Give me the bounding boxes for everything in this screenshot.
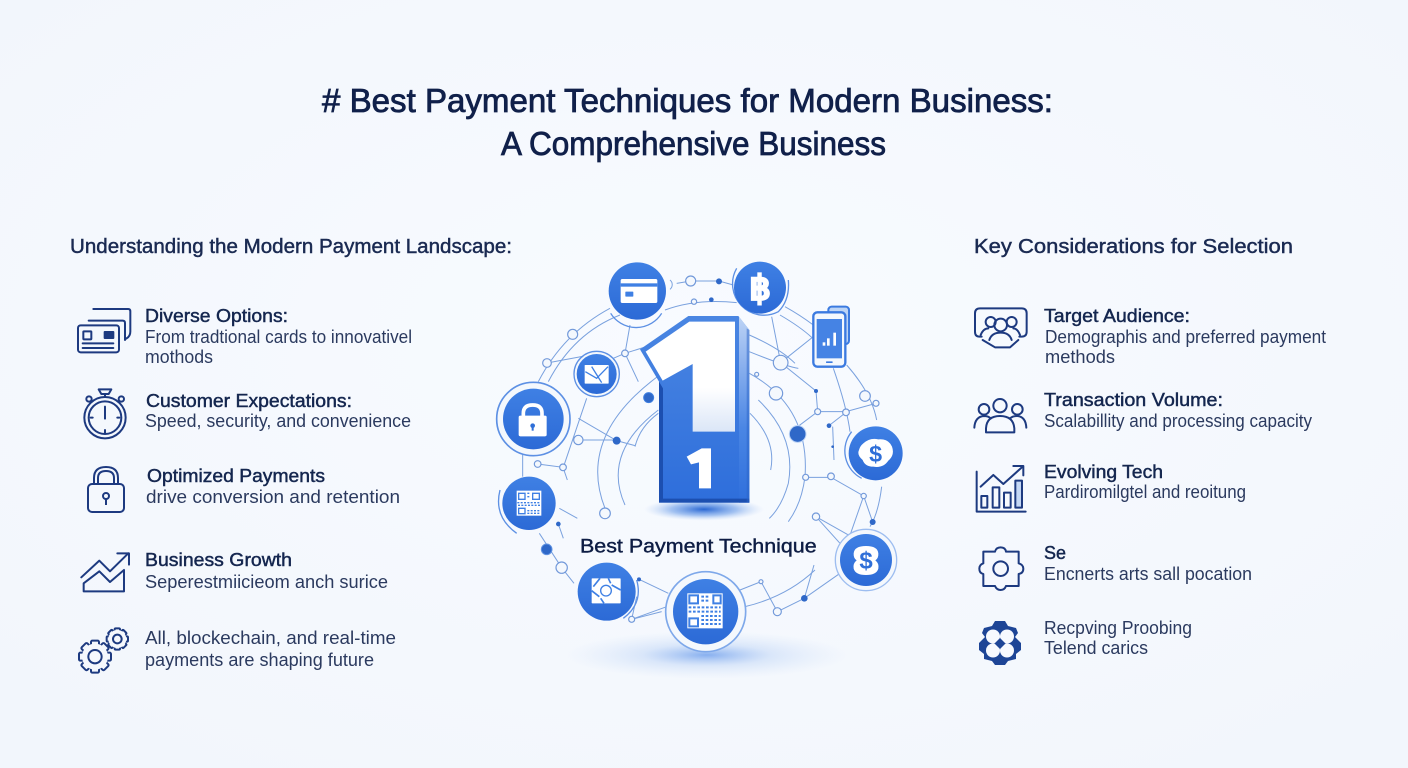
item: security xyxy=(979,543,1252,590)
text: evolving tech: Pardiromilgtel and reoitung xyxy=(1044,482,1246,502)
icon: dollar coin lower xyxy=(835,529,897,591)
text: target audience: Demographis and preferred payment xyxy=(1045,327,1326,347)
text: transaction volume xyxy=(1044,390,1312,431)
icon: solid flower badge xyxy=(979,621,1021,665)
text: recurring processing: Telend carics xyxy=(1044,638,1148,658)
text: diverse options: From tradtional cards to innovativel xyxy=(145,327,412,347)
text: diverse options xyxy=(145,306,412,367)
icon: qr bottom xyxy=(666,572,746,652)
icon: padlock xyxy=(88,467,124,512)
text: optimized payments: drive conversion and retention xyxy=(146,487,400,507)
text: evolving tech xyxy=(1044,462,1246,502)
icon: dollar coin upper xyxy=(845,426,903,480)
big number one xyxy=(640,316,764,521)
text: future technologies xyxy=(145,628,396,670)
bottom glow xyxy=(563,631,850,679)
title: A Comprehensive Business xyxy=(501,125,886,162)
central network illustration xyxy=(497,262,903,679)
title xyxy=(322,82,1053,162)
item: evolving tech xyxy=(977,462,1246,512)
icon: bar chart with arrow xyxy=(977,466,1026,512)
text: business growth xyxy=(145,550,388,592)
icon: padlock disc xyxy=(497,382,570,456)
icon: qr left xyxy=(499,477,556,533)
text: future technologies: All, blockechain, and real-time xyxy=(145,628,396,648)
icon: stacked cards xyxy=(78,309,130,352)
text: target audience: Target Audience: xyxy=(1044,306,1190,326)
text: transaction volume: Scalabillity and processing capacity xyxy=(1044,411,1312,431)
text: security xyxy=(1044,543,1252,584)
icon: stopwatch xyxy=(84,389,126,438)
item: business growth xyxy=(81,550,388,592)
item: target audience xyxy=(975,306,1326,367)
title: # Best Payment Techniques for Modern Business: xyxy=(322,82,1053,119)
icon: audience frame xyxy=(975,308,1027,347)
item: future technologies xyxy=(79,628,396,673)
text: future technologies: payments are shaping future xyxy=(145,650,374,670)
icon: smartphone xyxy=(813,307,849,367)
text: security: Encnerts arts sall pocation xyxy=(1044,564,1252,584)
text: transaction volume: Transaction Volume: xyxy=(1044,390,1223,410)
text: evolving tech: Evolving Tech xyxy=(1044,462,1163,482)
text: recurring processing xyxy=(1044,618,1192,658)
text: diverse options: Diverse Options: xyxy=(145,306,288,326)
icon: small envelope xyxy=(574,351,619,397)
text: customer expectations: Customer Expectations: xyxy=(146,391,352,411)
icon: puzzle cog xyxy=(979,547,1023,590)
icon: credit card xyxy=(609,262,666,328)
text: business growth: Seperestmiicieom anch surice xyxy=(145,572,388,592)
icon: dollar coin lower: $ xyxy=(859,548,873,575)
network nodes: filled xyxy=(541,278,876,602)
text: diverse options: mothods xyxy=(145,347,213,367)
text: optimized payments xyxy=(146,466,400,507)
icon: bitcoin: ฿ xyxy=(749,270,771,307)
item: transaction volume xyxy=(974,390,1312,432)
text: target audience xyxy=(1044,306,1326,367)
panel: understanding the modern payment landscape xyxy=(70,236,512,673)
heading: left panel: Understanding the Modern Payment Landscape: xyxy=(70,236,512,258)
icon: bitcoin xyxy=(733,262,789,315)
panel: key considerations for selection xyxy=(974,236,1326,665)
text: recurring processing: Recpving Proobing xyxy=(1044,618,1192,638)
text: customer expectations: Speed, security, and convenience xyxy=(145,411,411,431)
text: business growth: Business Growth xyxy=(145,550,292,570)
item: recurring processing xyxy=(979,618,1192,665)
icon: growth arrow xyxy=(81,553,129,591)
heading: right panel: Key Considerations for Selection xyxy=(974,236,1293,258)
icon: people group xyxy=(974,399,1026,432)
item: diverse options xyxy=(78,306,412,367)
item: customer expectations xyxy=(84,389,411,438)
icon: dollar coin upper: $ xyxy=(869,441,882,467)
text: security: Se xyxy=(1044,543,1066,563)
network nodes: hollow xyxy=(534,276,879,622)
text: customer expectations xyxy=(145,391,411,431)
center label: Best Payment Technique xyxy=(580,536,817,557)
icon: gift envelope xyxy=(578,563,638,621)
text: target audience: methods xyxy=(1045,347,1115,367)
icon: gears xyxy=(79,628,128,673)
network connections xyxy=(523,280,882,619)
text: optimized payments: Optimized Payments xyxy=(147,466,325,486)
item: optimized payments xyxy=(88,466,400,512)
